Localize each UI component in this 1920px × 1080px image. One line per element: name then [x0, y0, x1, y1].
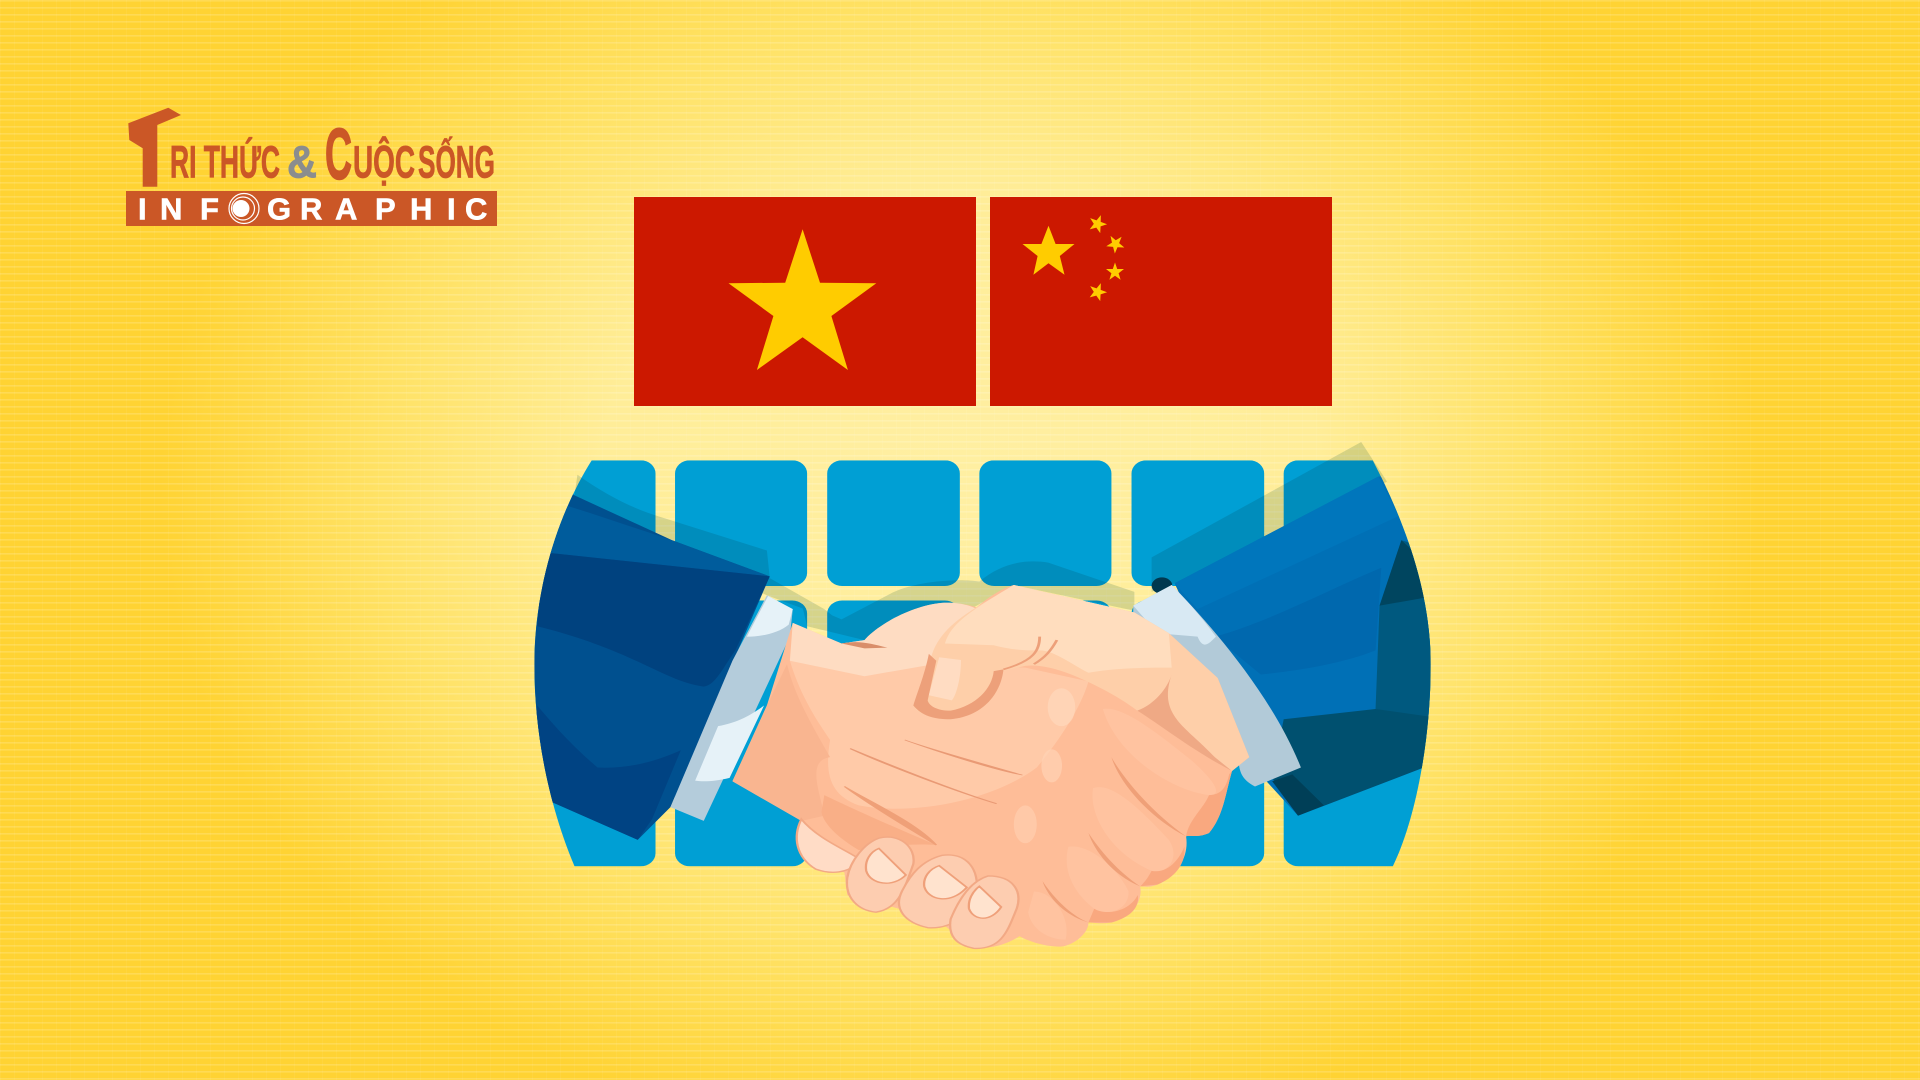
logo wordmark: &	[287, 136, 317, 188]
knuckle highlights	[1048, 688, 1075, 726]
logo wordmark: C	[325, 115, 352, 195]
right shirt cuff	[1133, 585, 1301, 786]
left jacket sleeve	[534, 494, 770, 840]
thumb	[913, 654, 1003, 719]
left sleeve shading	[550, 506, 768, 576]
right hand back	[913, 585, 1249, 771]
right hand fingers	[1103, 709, 1216, 795]
logo wordmark	[170, 115, 495, 195]
logo infographic bar	[126, 191, 497, 226]
logo: Tri Thức & Cuộc Sống Infographic: GRAPHIC	[267, 192, 487, 226]
left hand fingers	[797, 819, 862, 872]
China large star	[1022, 226, 1074, 275]
left hand back	[790, 661, 1088, 809]
flag: China	[990, 197, 1332, 406]
Vietnam star	[728, 229, 876, 370]
right sleeve shading	[1264, 526, 1284, 536]
left shirt cuff	[670, 595, 793, 821]
logo wordmark: UỘC	[353, 136, 415, 188]
logo: Tri Thức & Cuộc Sống Infographic: INF	[138, 192, 219, 226]
hands base silhouette	[732, 585, 1249, 948]
handshake illustration	[534, 442, 1431, 950]
blue tile grid	[520, 460, 1444, 866]
flag: Vietnam	[634, 197, 976, 406]
logo ring icon	[229, 194, 259, 224]
logo: Tri Thức & Cuộc Sống Infographic	[126, 108, 497, 226]
clasped hands	[732, 585, 1249, 948]
China small stars	[1087, 212, 1129, 302]
palm creases	[905, 740, 1022, 775]
logo T mark	[128, 108, 181, 187]
right jacket sleeve	[1152, 476, 1431, 816]
logo wordmark: RI THỨC	[170, 136, 280, 188]
logo wordmark: SỐNG	[418, 136, 495, 188]
translucent sleeve shadows	[575, 442, 1387, 640]
